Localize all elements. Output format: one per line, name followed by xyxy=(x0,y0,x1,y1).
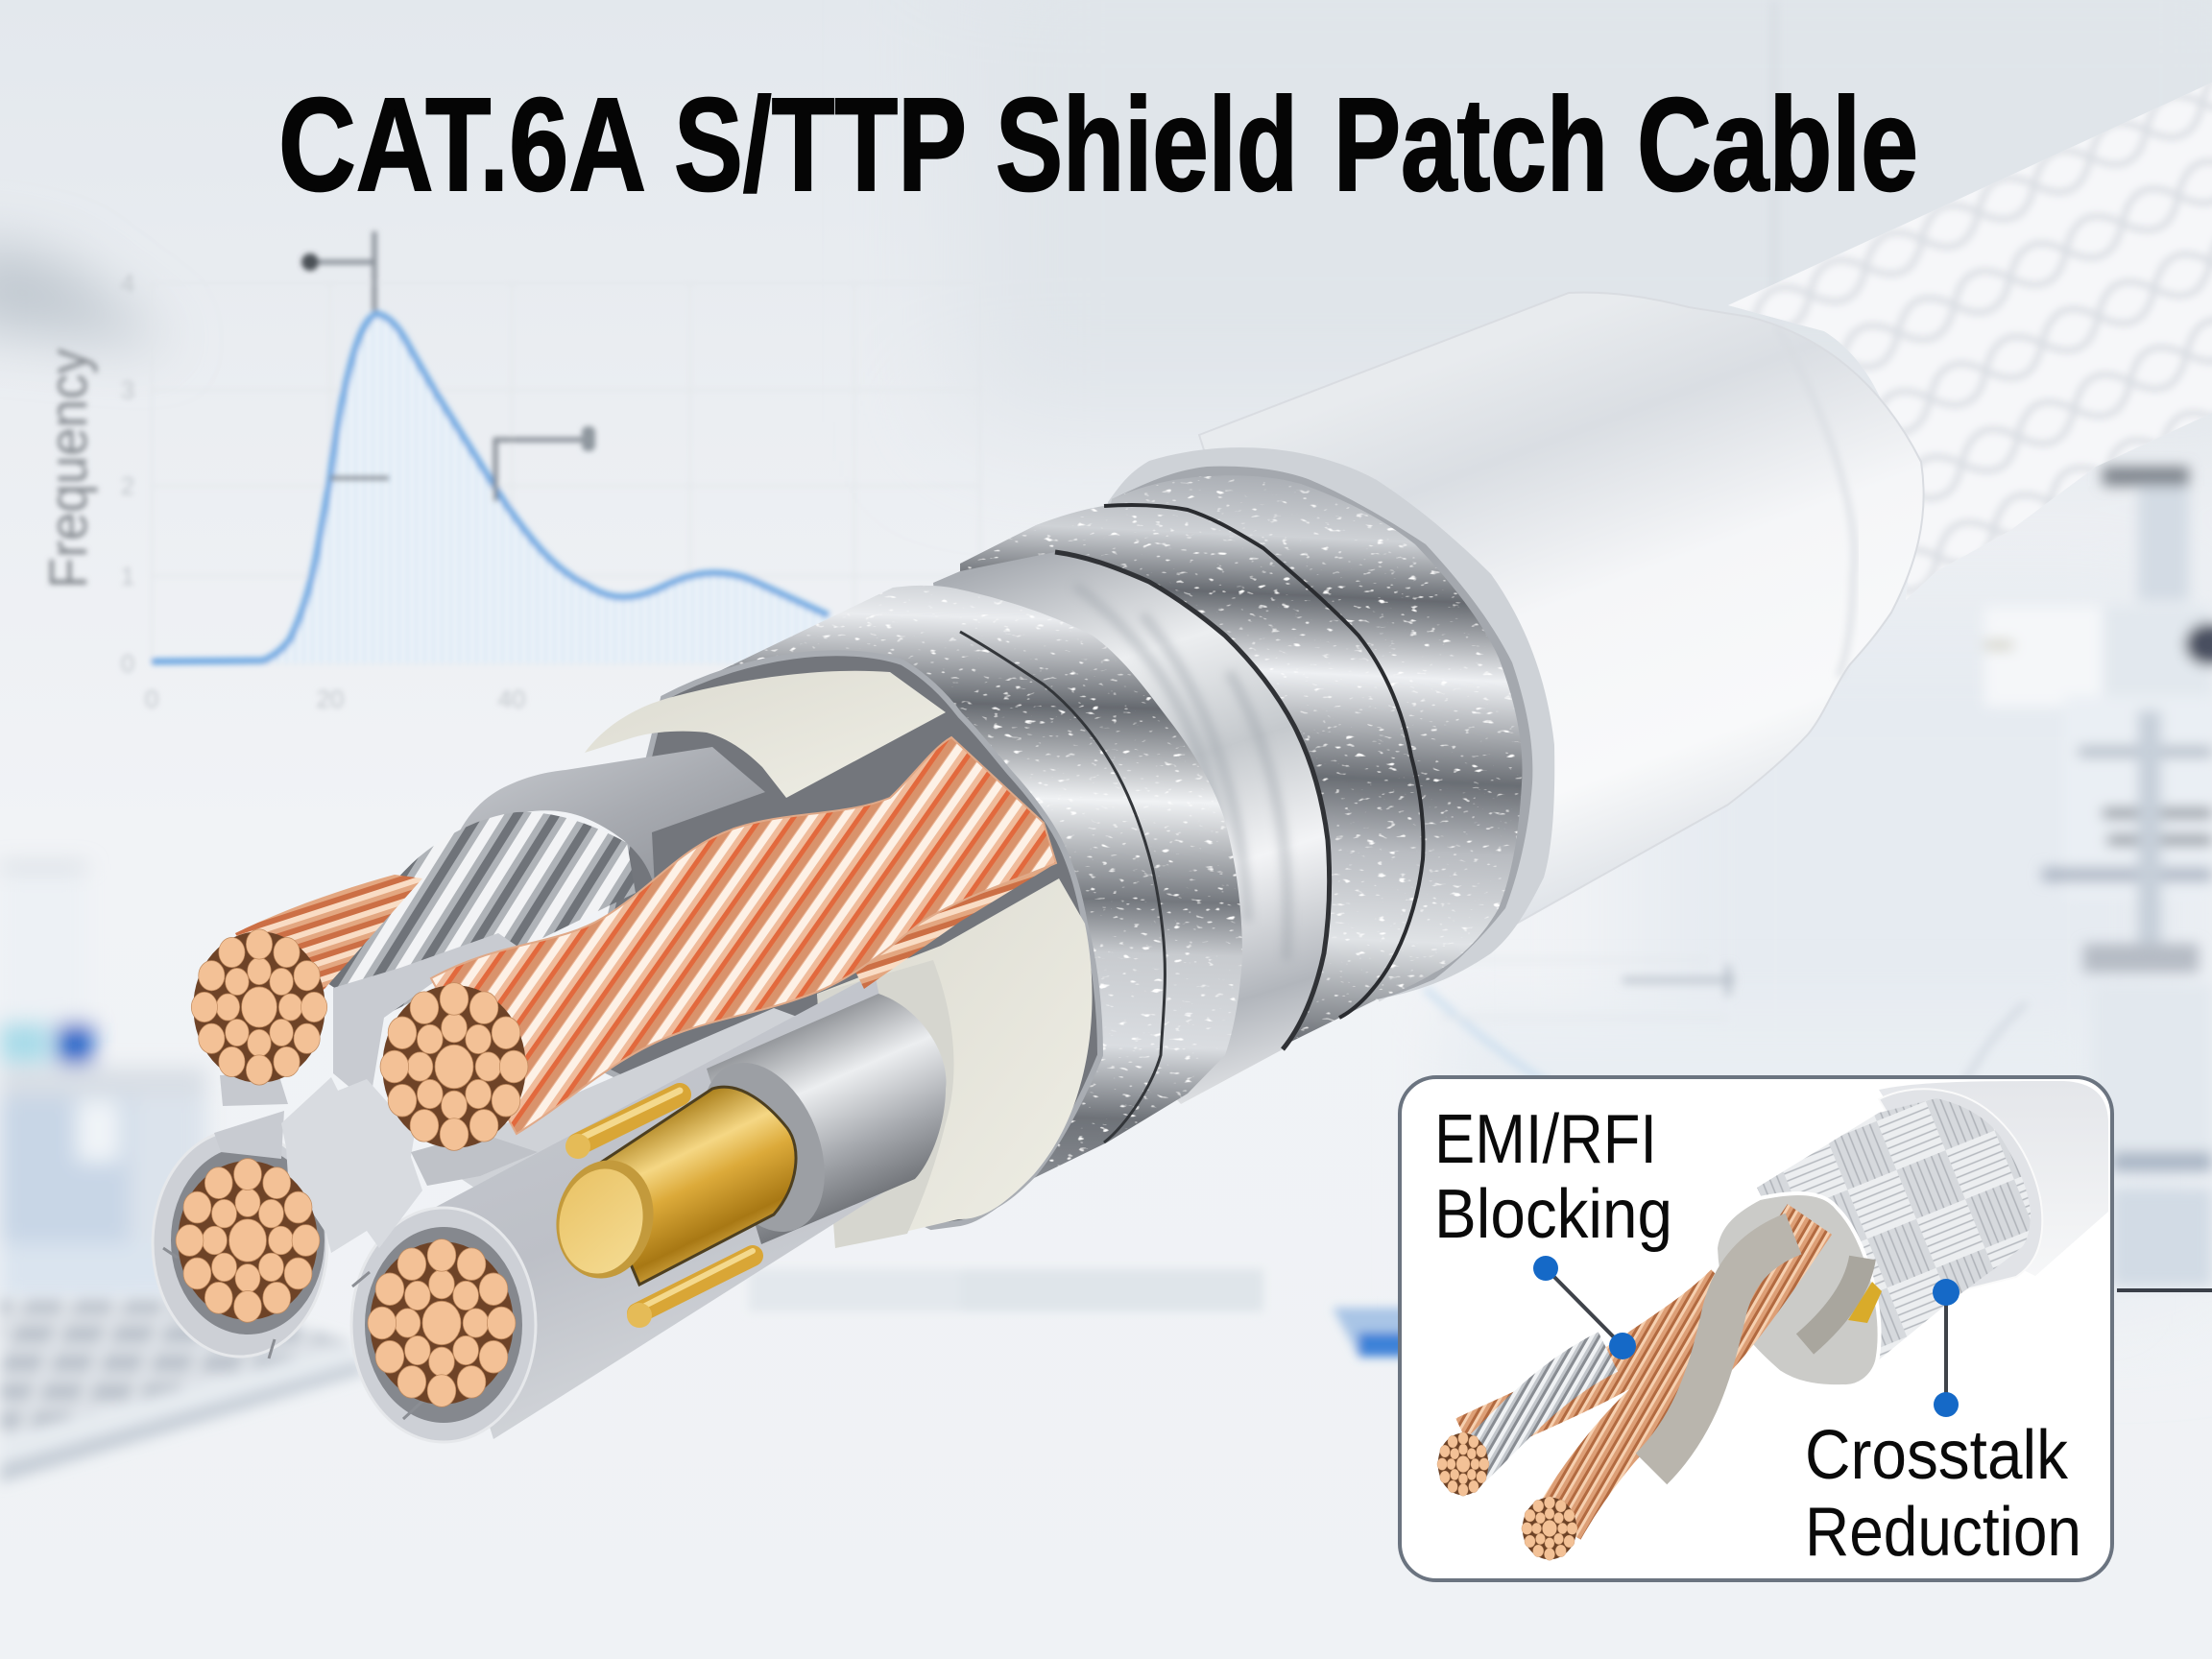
rear copper twist xyxy=(845,863,1056,989)
middle metal band xyxy=(960,505,1423,1060)
axis labels: 2 xyxy=(121,471,134,500)
foil swirl highlights xyxy=(1075,586,1287,960)
label: Crosstalk Reduction: Crosstalk xyxy=(1805,1417,2069,1494)
sleeve collar line xyxy=(1776,326,1855,677)
inset bundle ends xyxy=(1437,1432,1577,1560)
large twisted copper conductor xyxy=(431,737,1056,1134)
arm: upper-left spacer xyxy=(220,1073,288,1106)
axis labels: 3 xyxy=(121,375,134,404)
white sleeve xyxy=(1199,293,1924,1000)
chart: blurred frequency curve in background xyxy=(37,231,980,713)
inset braided shield xyxy=(1757,1098,2031,1361)
title: Patch xyxy=(1334,71,1608,219)
curve line xyxy=(152,314,829,661)
front metal band xyxy=(663,586,1242,1227)
housing: lower-left conductor xyxy=(153,1111,327,1358)
lower gray conductor tube xyxy=(423,974,917,1439)
y axis title: Frequency xyxy=(37,349,98,589)
central arm xyxy=(428,1008,826,1190)
inset gold pin xyxy=(1848,1282,1882,1323)
translucent foil layer xyxy=(933,552,1330,1104)
axis labels: 20 xyxy=(317,685,344,713)
beige shaded rim xyxy=(817,960,954,1248)
title: CAT.6A xyxy=(278,71,646,219)
inset jacket ring xyxy=(1879,1089,2042,1291)
dark interior opening xyxy=(576,653,1100,1227)
hub side shelves xyxy=(411,1133,538,1186)
axis labels: 1 xyxy=(121,562,134,590)
lab instrument xyxy=(1984,467,2212,1286)
title: Shield xyxy=(996,71,1298,219)
label: EMI/RFI Blocking xyxy=(1434,1101,1672,1253)
inset copper conductor lower xyxy=(1557,1219,1810,1527)
outer metal band xyxy=(1056,475,1523,1060)
axis labels: 4 xyxy=(121,269,134,298)
middle band seam xyxy=(1104,505,1423,1018)
gold connector xyxy=(545,1045,848,1328)
inset silver conductor xyxy=(1469,1352,1608,1467)
braided white jacket xyxy=(1728,83,2212,599)
annotation markers xyxy=(310,231,592,501)
label: EMI/RFI Blocking: EMI/RFI xyxy=(1434,1101,1657,1178)
copper bundle ends xyxy=(176,929,528,1407)
title xyxy=(278,71,1918,219)
silver conductor xyxy=(322,812,636,1018)
housing: lower conductor xyxy=(351,1208,536,1442)
inset white jacket xyxy=(1879,1081,2108,1276)
cable: outer braided jacket, sleeve and metal shielding xyxy=(663,58,2212,1227)
axis labels: 0 xyxy=(145,685,158,713)
silver cylinder behind connector xyxy=(707,994,947,1244)
panel frame xyxy=(1400,1077,2112,1580)
left bench with beakers xyxy=(0,864,206,1298)
lower beige insulation xyxy=(817,878,1093,1248)
beige top insulation xyxy=(585,671,946,798)
front band seam xyxy=(960,632,1165,1142)
keyboard xyxy=(0,1300,365,1483)
curve fill xyxy=(152,314,864,663)
axis labels: 40 xyxy=(498,685,525,713)
cable core: interior conductors and insulators xyxy=(153,653,1100,1442)
inset gray insulated strand xyxy=(1651,1234,1793,1469)
blue callout dots xyxy=(1533,1256,1960,1417)
back-left copper conductor xyxy=(235,875,422,1018)
top gray spacer around right bundle xyxy=(333,933,517,1104)
translucent sleeve ring xyxy=(1108,447,1554,1056)
foil edge xyxy=(1055,552,1330,1049)
rear shelf and blue part xyxy=(749,1269,1422,1357)
callout panel: shield detail inset xyxy=(1400,1077,2112,1580)
inset copper conductor upper xyxy=(1466,1286,1728,1440)
axis labels: 0 xyxy=(121,649,134,678)
label: Crosstalk Reduction: Reduction xyxy=(1805,1494,2081,1571)
inset inner gray strand xyxy=(1805,1258,1863,1344)
label: Crosstalk Reduction xyxy=(1805,1417,2081,1571)
label: EMI/RFI Blocking: Blocking xyxy=(1434,1176,1672,1253)
leader lines xyxy=(1546,1268,1946,1405)
title: S/TTP xyxy=(674,71,967,219)
axis labels xyxy=(121,269,525,713)
title: Cable xyxy=(1637,71,1918,219)
central hub xyxy=(281,1077,422,1253)
inner darker ring xyxy=(1112,467,1532,1056)
inset opening xyxy=(1716,1193,1880,1386)
upper gray tube xyxy=(459,747,765,888)
